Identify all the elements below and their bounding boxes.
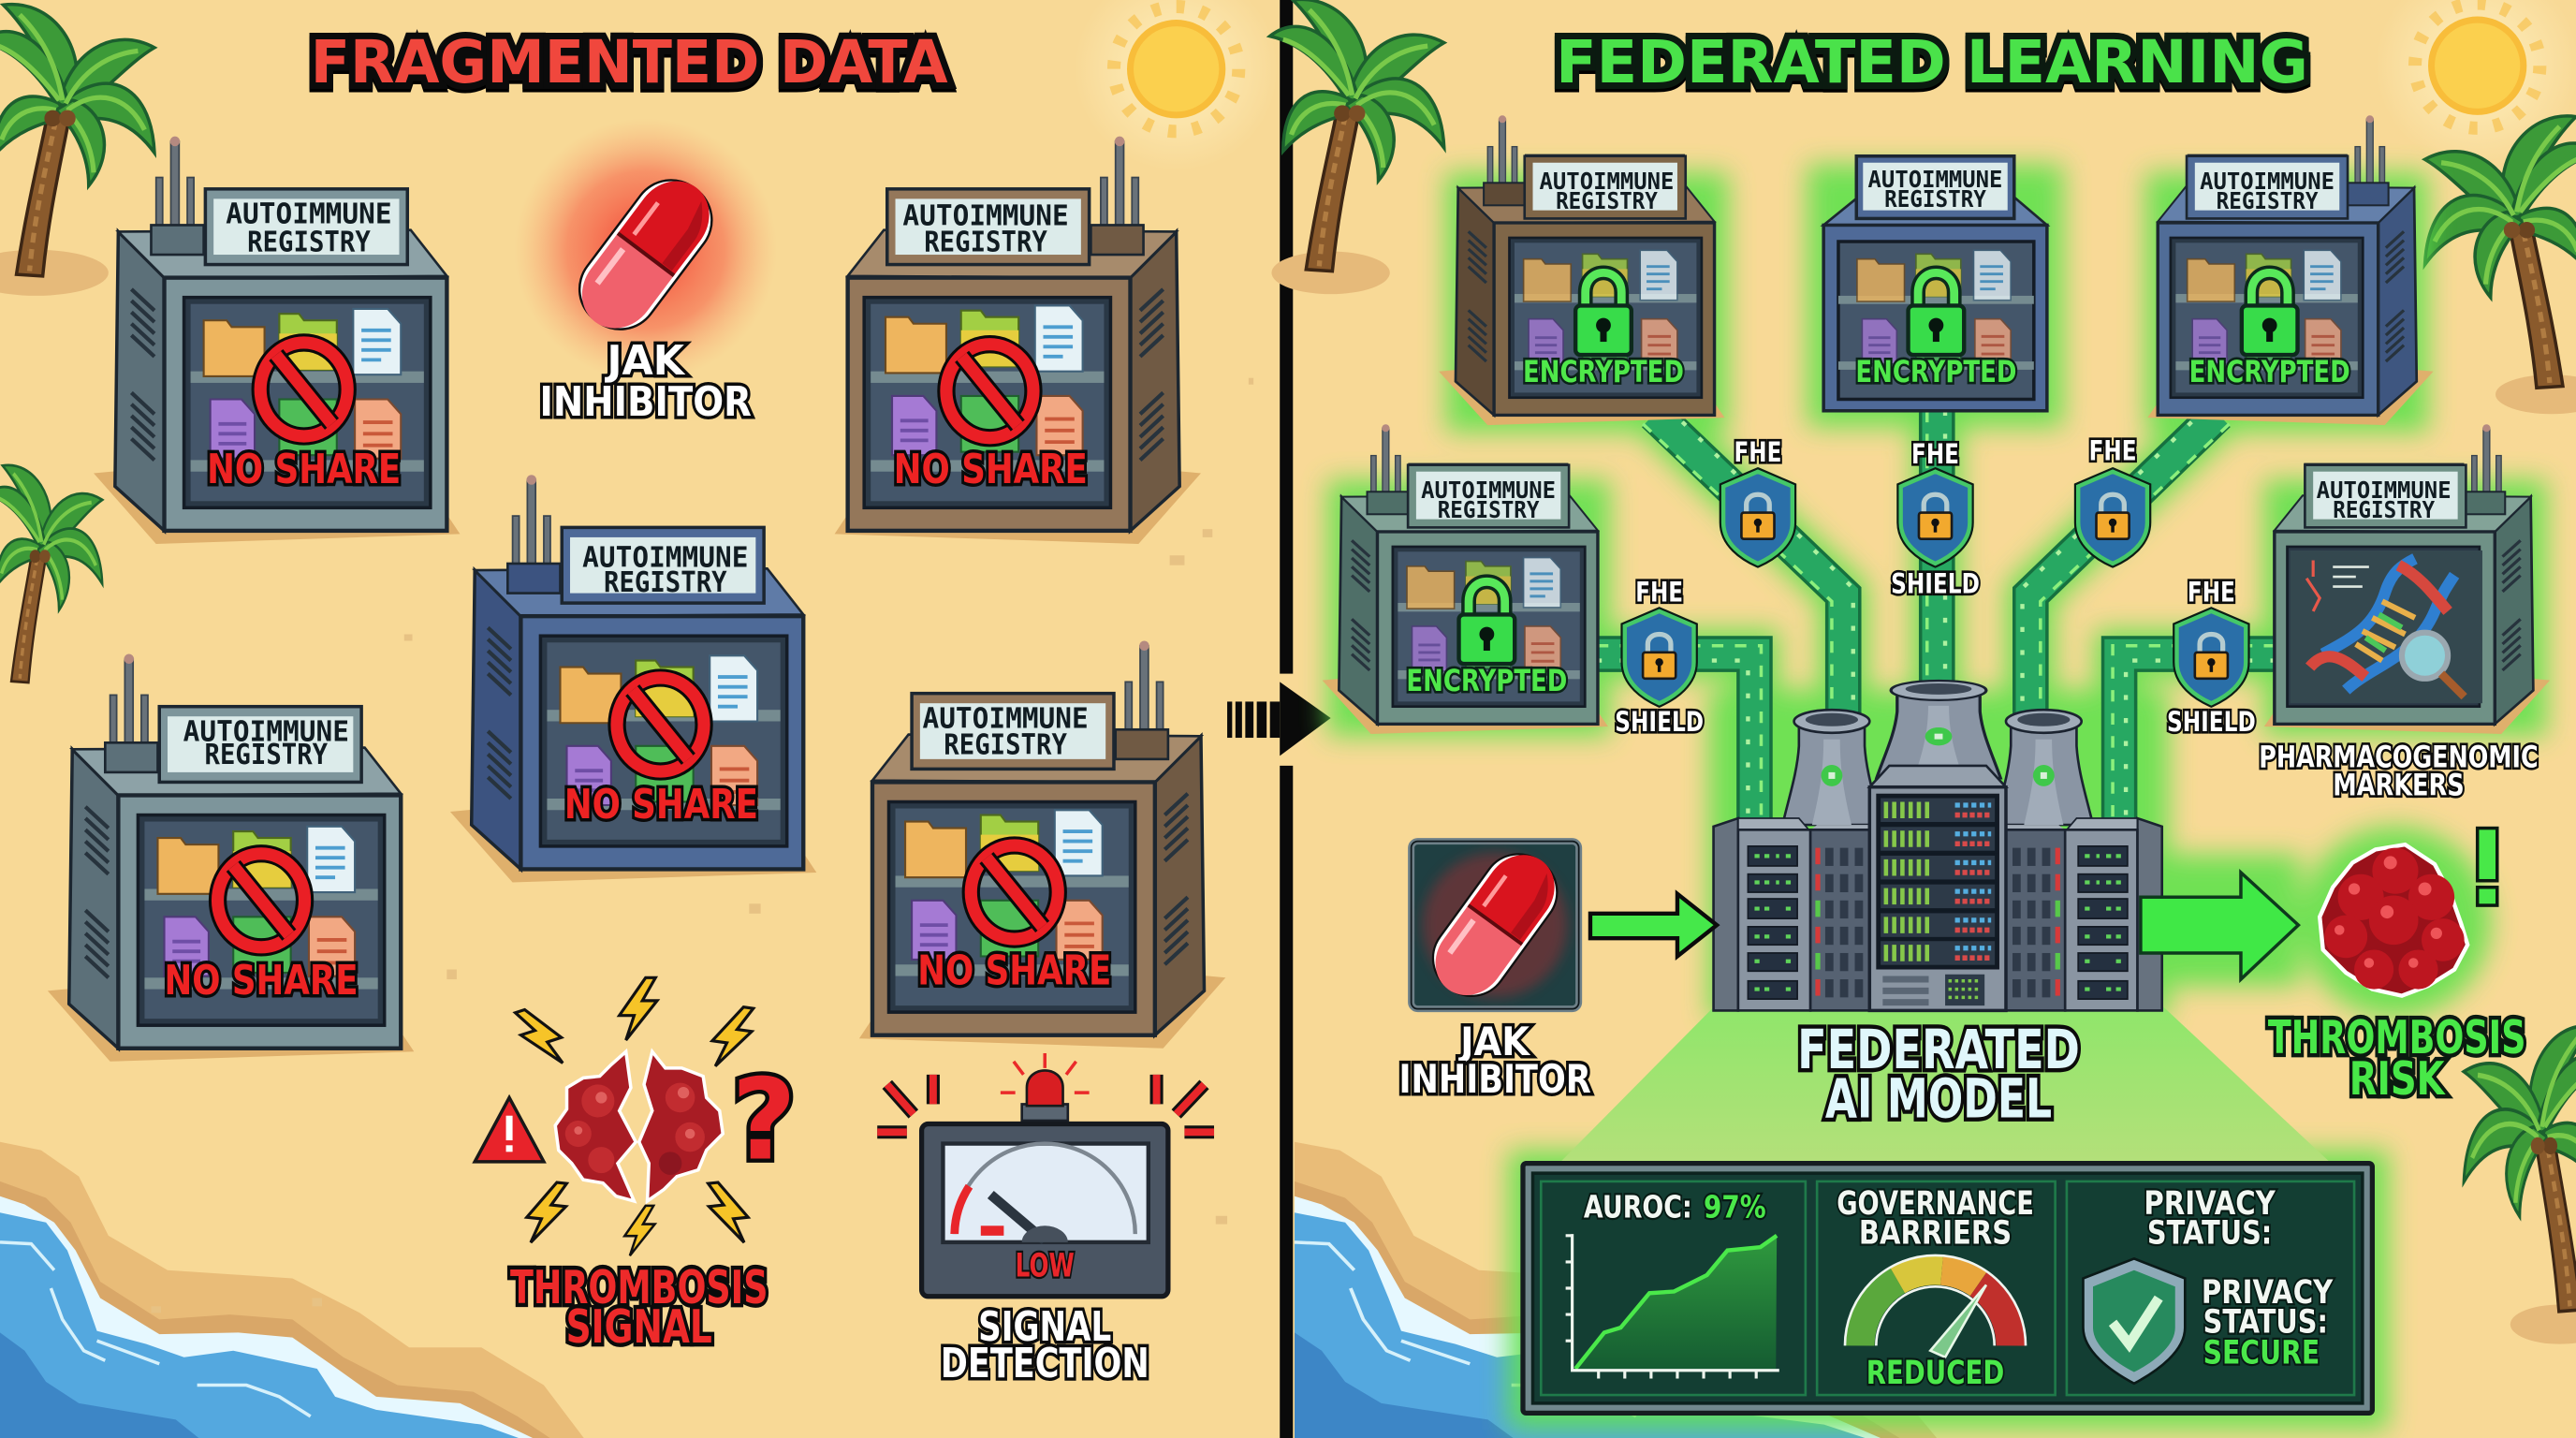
arrow: JAK inhibitor to model <box>1590 894 1717 956</box>
JAK inhibitor pill with red glow: JAK <box>605 337 686 385</box>
icon: split clot <box>555 1051 723 1201</box>
title: federated learning: FEDERATED LEARNING <box>1556 27 2308 96</box>
registry R1 encrypted <box>1439 115 1725 425</box>
JAK inhibitor input: INHIBITOR <box>1398 1056 1591 1102</box>
federated AI server with cooling towers <box>1714 681 2162 1010</box>
registry cabinet 2: NO SHARE <box>894 446 1088 493</box>
registry R4 encrypted: AUTOIMMUNE <box>1421 477 1556 504</box>
shield: FHE lower left <box>1615 576 1704 738</box>
registry cabinet 2: REGISTRY <box>924 227 1047 259</box>
label: pharmacogenomic markers: MARKERS <box>2333 769 2465 802</box>
sun, left <box>1075 0 1278 171</box>
thrombosis signal: SIGNAL <box>566 1299 712 1354</box>
registry R3 encrypted: AUTOIMMUNE <box>2200 168 2334 195</box>
registry R1 encrypted: REGISTRY <box>1556 187 1658 214</box>
title: fragmented data: FRAGMENTED DATA <box>311 27 948 96</box>
arrow: model to thrombosis risk <box>2141 873 2298 979</box>
thrombosis risk clot <box>2268 829 2525 1106</box>
metric: AUROC chart: AUROC: <box>1584 1189 1692 1225</box>
icon: warning triangle <box>475 1097 544 1162</box>
shield: FHE top right <box>2078 434 2147 564</box>
shield: FHE lower left: FHE <box>1635 576 1683 608</box>
metrics dashboard <box>1523 1164 2372 1413</box>
registry cabinet 3: AUTOIMMUNE <box>582 542 748 575</box>
palm tree, upper left of panel <box>1270 0 1444 294</box>
icon: exclamation mark <box>2478 829 2497 905</box>
shield: FHE top left: FHE <box>1734 436 1781 468</box>
metric: privacy status: STATUS: <box>2203 1302 2328 1341</box>
JAK inhibitor input: JAK <box>1458 1019 1530 1064</box>
shield: FHE top left <box>1723 436 1793 564</box>
sun, right <box>2376 0 2576 168</box>
registry R5 pharmacogenomic: REGISTRY <box>2333 496 2435 523</box>
meter dial <box>943 1144 1149 1242</box>
signal detection meter: SIGNAL <box>978 1303 1111 1351</box>
registry R1 encrypted: ENCRYPTED <box>1523 356 1684 389</box>
metric: privacy status: SECURE <box>2203 1334 2320 1372</box>
shield: FHE lower right: FHE <box>2188 576 2235 608</box>
metric: AUROC chart: 97% <box>1704 1189 1766 1225</box>
registry cabinet 1 <box>94 137 460 544</box>
metric: governance barriers gauge: GOVERNANCE <box>1837 1184 2034 1223</box>
metric: privacy status: PRIVACY <box>2144 1184 2276 1223</box>
registry cabinet 5: REGISTRY <box>944 729 1067 762</box>
JAK inhibitor input <box>1398 839 1591 1102</box>
meter body <box>922 1123 1168 1297</box>
palm tree, upper left <box>0 5 154 296</box>
registry R3 encrypted: ENCRYPTED <box>2189 356 2350 389</box>
thrombosis risk clot: RISK <box>2349 1051 2446 1106</box>
registry cabinet 2: AUTOIMMUNE <box>902 199 1069 232</box>
arrow: fragmented to federated <box>1227 682 1331 756</box>
panel: federated learning <box>1270 0 2576 1438</box>
registry cabinet 3: NO SHARE <box>564 781 758 829</box>
shield: FHE lower left: SHIELD <box>1615 706 1704 738</box>
green glow layer <box>1327 165 2546 1430</box>
registry R4 encrypted: REGISTRY <box>1438 496 1540 523</box>
registry cabinet 4 <box>48 654 414 1062</box>
icon: siren with rays <box>877 1053 1214 1132</box>
encrypted circuit pipes <box>1597 406 2276 822</box>
registry R2 encrypted <box>1823 156 2047 411</box>
registry R2 encrypted: AUTOIMMUNE <box>1868 166 2002 193</box>
beach and sea, left <box>0 1142 585 1438</box>
panel: fragmented data <box>0 0 1278 1438</box>
federated AI model label: FEDERATED <box>1797 1018 2080 1081</box>
sand specks, left <box>151 378 1253 1313</box>
JAK inhibitor pill with red glow: INHIBITOR <box>540 378 752 426</box>
metric: privacy status <box>2067 1181 2354 1395</box>
shield: FHE lower right <box>2167 576 2256 738</box>
registry R3 encrypted: REGISTRY <box>2217 187 2319 214</box>
metric: governance barriers gauge: BARRIERS <box>1859 1214 2012 1253</box>
icon: lightning bolts <box>514 977 755 1255</box>
JAK inhibitor pill with red glow <box>514 118 777 426</box>
metric: governance barriers gauge <box>1817 1181 2056 1395</box>
palm tree, lower right <box>2464 1026 2576 1344</box>
registry R4 encrypted: ENCRYPTED <box>1406 665 1567 698</box>
registry R5 pharmacogenomic: AUTOIMMUNE <box>2317 477 2452 504</box>
registry cabinet 4: AUTOIMMUNE <box>183 716 349 749</box>
registry cabinet 1: REGISTRY <box>247 227 371 259</box>
metric: AUROC chart <box>1541 1181 1806 1395</box>
registry cabinet 5: NO SHARE <box>917 946 1111 994</box>
registry cabinet 4: NO SHARE <box>165 957 359 1005</box>
registry cabinet 5: AUTOIMMUNE <box>922 703 1089 736</box>
signal detection meter <box>877 1053 1214 1387</box>
registry cabinet 3 <box>450 475 816 882</box>
registry cabinet 2 <box>835 137 1201 544</box>
shield: FHE top centre <box>1891 438 1980 600</box>
registry R2 encrypted: REGISTRY <box>1884 185 1986 213</box>
palm tree, right <box>2425 116 2576 414</box>
beach and sea, right <box>1295 1142 1938 1438</box>
registry cabinet 3: REGISTRY <box>604 566 727 599</box>
registry cabinet 1: AUTOIMMUNE <box>226 198 392 231</box>
shield: FHE top centre: SHIELD <box>1891 568 1980 600</box>
registry cabinet 5 <box>859 640 1225 1049</box>
label: pharmacogenomic markers <box>2259 741 2539 802</box>
signal detection meter: LOW <box>1016 1247 1075 1285</box>
shield: FHE lower right: SHIELD <box>2167 706 2256 738</box>
registry R5 pharmacogenomic <box>2264 424 2550 734</box>
shield: FHE top centre: FHE <box>1911 438 1959 470</box>
palm tree, mid left <box>0 465 102 682</box>
thrombosis signal <box>475 977 797 1354</box>
registry R2 encrypted: ENCRYPTED <box>1855 356 2016 389</box>
federated AI model label <box>1797 1018 2080 1130</box>
registry cabinet 4: REGISTRY <box>205 739 328 771</box>
green beam under server <box>1559 1005 2331 1164</box>
icon: question mark: ? <box>732 1055 797 1185</box>
metric: governance barriers gauge: REDUCED <box>1866 1354 2004 1392</box>
icon: DNA and magnifier <box>2291 550 2482 703</box>
federated AI model label: AI MODEL <box>1825 1066 2052 1130</box>
registry R3 encrypted <box>2147 115 2434 425</box>
signal detection meter: DETECTION <box>941 1340 1149 1387</box>
metric: privacy status: STATUS: <box>2147 1214 2272 1253</box>
registry R4 encrypted <box>1323 424 1608 734</box>
registry R1 encrypted: AUTOIMMUNE <box>1540 168 1674 195</box>
thrombosis signal: THROMBOSIS <box>510 1260 768 1314</box>
divider between panels <box>1280 0 1293 1438</box>
registry cabinet 1: NO SHARE <box>207 446 401 493</box>
metric: privacy status: PRIVACY <box>2202 1273 2334 1312</box>
shield: FHE top right: FHE <box>2089 434 2137 466</box>
